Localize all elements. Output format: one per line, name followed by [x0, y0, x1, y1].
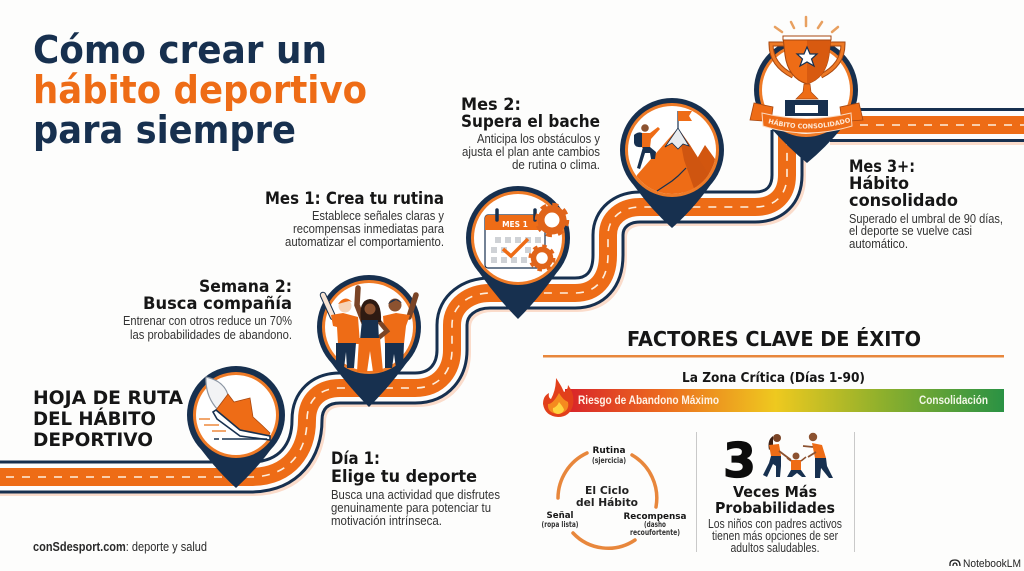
habit cycle: (ropa lista)	[542, 520, 578, 529]
stat: 3 veces más: Los niños con padres activos	[708, 517, 842, 531]
pin: trophy with ribbon: HÁBITO CONSOLIDADO	[768, 118, 850, 129]
habit cycle: Señal	[546, 511, 574, 521]
step: Mes 3+	[849, 157, 1003, 251]
panel: factores clave de éxito	[542, 327, 1004, 555]
habit cycle: El Ciclo	[585, 484, 629, 497]
heading: hoja de ruta: DEL HÁBITO	[33, 407, 156, 430]
icon: flame	[543, 378, 573, 417]
step: Día 1: genuinamente para potenciar tu	[331, 501, 491, 515]
icon: family	[763, 433, 833, 478]
step: Semana 2: Entrenar con otros reduce un 70%	[123, 314, 292, 328]
heading: zona crítica: La Zona Crítica (Días 1-90)	[682, 370, 865, 386]
habit cycle: (dasho	[644, 520, 666, 529]
step: Mes 1: automatizar el comportamiento.	[285, 235, 444, 249]
risk gradient bar: Riesgo de Abandono Máximo	[578, 395, 719, 407]
habit cycle: Rutina	[592, 446, 626, 456]
step: Día 1: Busca una actividad que disfrutes	[331, 488, 500, 502]
stat: 3 veces más: Veces Más	[733, 483, 817, 501]
pin: team of three people	[317, 275, 421, 407]
pin: calendar with gears	[466, 186, 570, 319]
step: Mes 3+: el deporte se vuelve casi	[849, 224, 972, 238]
pin: trophy with ribbon	[750, 16, 864, 163]
step: Mes 2: de rutina o clima.	[512, 158, 600, 172]
step: Semana 2: las probabilidades de abandono.	[130, 328, 292, 342]
title: Cómo crear un	[33, 28, 327, 72]
heading: factores: FACTORES CLAVE DE ÉXITO	[627, 327, 921, 351]
step: Mes 1: Establece señales claras y	[312, 209, 445, 223]
winding road	[0, 125, 1024, 479]
footer source: conSdesport.com: deporte y salud	[33, 540, 207, 554]
step: Día 1: Día 1:	[331, 449, 380, 468]
pin: calendar with gears: MES 1	[502, 220, 528, 229]
title	[33, 28, 367, 152]
step: Mes 2	[461, 95, 601, 172]
title: para siempre	[33, 108, 296, 152]
habit cycle: recoufortente)	[630, 528, 680, 537]
step: Semana 2	[123, 277, 292, 342]
habit cycle: (sjercicia)	[592, 456, 626, 465]
step: Mes 3+: automático.	[849, 237, 908, 251]
stat: 3 veces más: Probabilidades	[715, 499, 835, 517]
step: Mes 3+: Mes 3+:	[849, 157, 915, 176]
pin: climber on mountain	[620, 98, 724, 228]
stat: 3 veces más: tienen más opciones de ser	[712, 529, 838, 543]
pin: running shoe	[187, 366, 285, 488]
heading: hoja de ruta: DEPORTIVO	[33, 429, 153, 451]
title: hábito deportivo	[33, 68, 367, 112]
step: Mes 2: Supera el bache	[461, 112, 600, 131]
step: Mes 3+: Hábito	[849, 174, 909, 193]
step: Mes 1	[265, 189, 445, 249]
notebooklm badge: NotebookLM	[963, 558, 1021, 570]
habit cycle: Recompensa	[624, 512, 686, 522]
stat: 3 veces más	[708, 434, 842, 555]
risk gradient bar: Consolidación	[919, 395, 988, 407]
step: Mes 2: Mes 2:	[461, 95, 521, 114]
habit cycle	[542, 446, 686, 548]
step: Mes 2: ajusta el plan ante cambios	[462, 145, 600, 159]
trophy rays	[775, 17, 838, 32]
habit cycle: del Hábito	[576, 496, 638, 509]
risk gradient bar	[565, 389, 1004, 412]
step: Mes 1: Mes 1: Crea tu rutina	[265, 189, 444, 208]
step: Semana 2: Semana 2:	[199, 277, 292, 296]
step: Mes 2: Anticipa los obstáculos y	[477, 132, 601, 146]
stat: 3 veces más: adultos saludables.	[730, 541, 820, 555]
step: Mes 3+: Superado el umbral de 90 días,	[849, 212, 1003, 226]
stat: 3 veces más: 3	[723, 434, 756, 489]
step: Día 1	[331, 449, 500, 528]
step: Mes 1: recompensas inmediatas para	[293, 222, 444, 236]
step: Semana 2: Busca compañía	[143, 294, 292, 313]
step: Día 1: Elige tu deporte	[331, 467, 477, 486]
step: Mes 3+: consolidado	[849, 191, 958, 210]
heading: hoja de ruta	[33, 387, 183, 451]
heading: hoja de ruta: HOJA DE RUTA	[33, 387, 183, 409]
step: Día 1: motivación intrínseca.	[331, 514, 442, 528]
